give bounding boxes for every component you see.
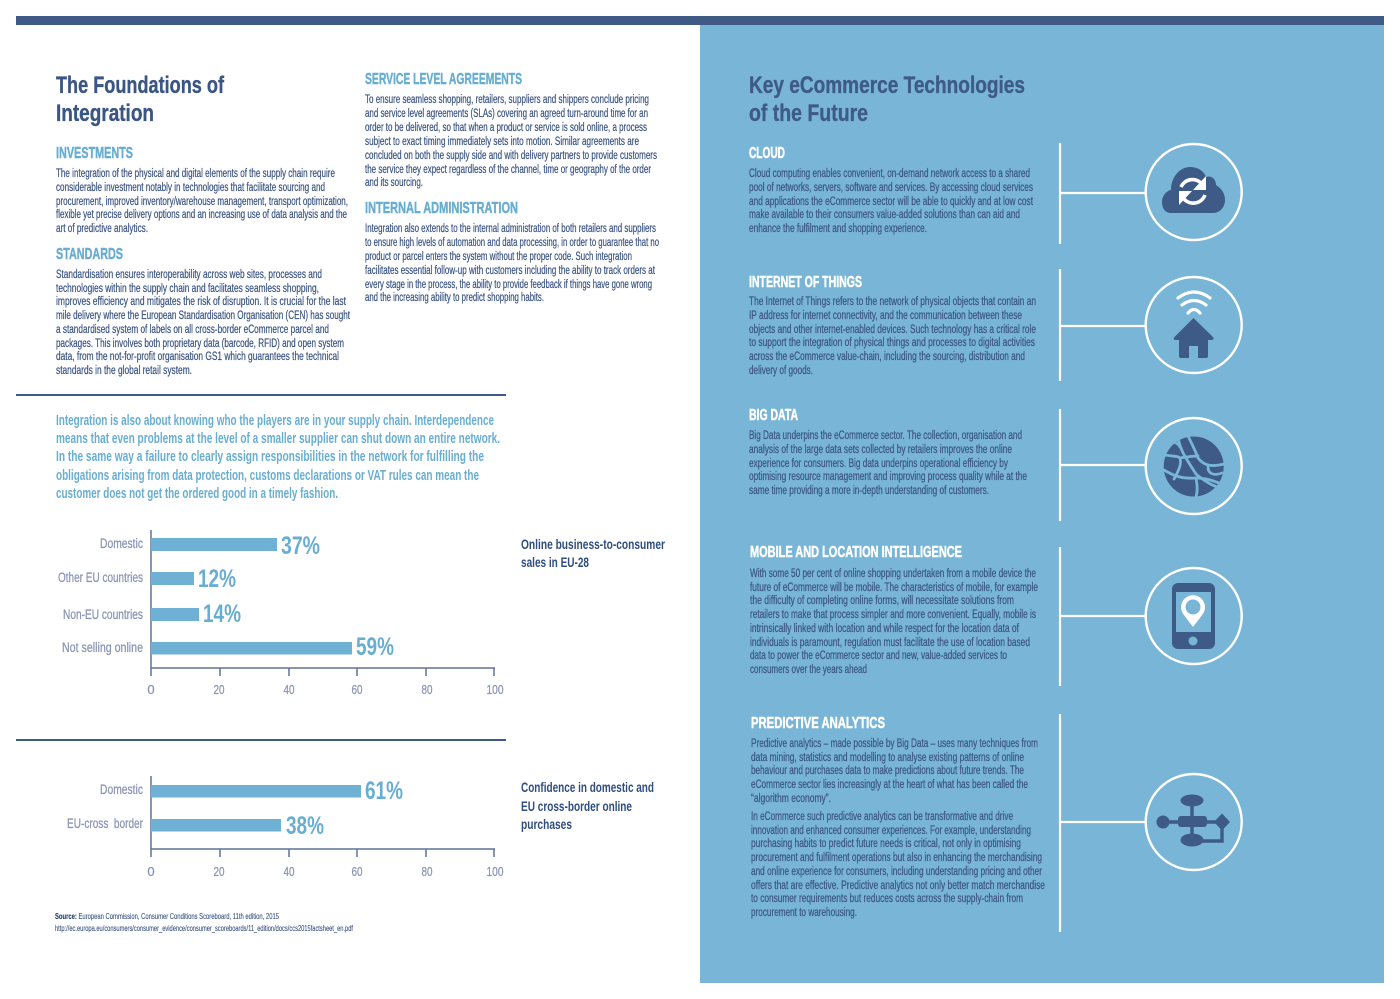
source note: http://ec.europa.eu/consumers/consumer_evidence/consumer_scoreboards/11_edition/docs/ccs2015factsheet_en.pdf [55, 923, 353, 933]
panel: key technologies background [700, 25, 1384, 983]
callout: supply chain players: In the same way a failure to clearly assign responsibilities in the network for fulfilling the [56, 449, 484, 465]
connector: mobile [1060, 547, 1146, 686]
bar chart: online business-to-consumer sales: Domestic [100, 536, 143, 551]
section: internal administration: INTERNAL ADMINISTRATION [365, 200, 518, 217]
source note [55, 911, 353, 933]
section: big data [749, 407, 1027, 497]
chart title: confidence: EU cross-border online [521, 799, 632, 814]
bar chart: online business-to-consumer sales: 60 [352, 682, 362, 697]
section: investments: The integration of the physical and digital elements of the supply chain require [56, 168, 335, 180]
callout: supply chain players [56, 413, 500, 502]
section: mobile and location intelligence: future of eCommerce will be mobile. The characteristics of mobile, for example [750, 582, 1038, 594]
section: internet of things [749, 274, 1036, 377]
section: standards: packages. This involves both proprietary data (barcode, RFID) and open system [56, 338, 344, 350]
bar chart: online business-to-consumer sales: 12% [198, 565, 236, 593]
section: internet of things: INTERNET OF THINGS [749, 274, 862, 291]
section: big data: experience for consumers. Big data underpins operational efficiency by [749, 458, 1008, 470]
bar chart: online business-to-consumer sales: 20 [214, 682, 224, 697]
bar chart: confidence in purchases [67, 776, 504, 879]
callout: supply chain players: Integration is also about knowing who the players are in your supply chain. Interdependence [56, 413, 494, 429]
chart title: online sales [521, 537, 666, 570]
section: predictive analytics [751, 715, 1045, 919]
section: internet of things: across the eCommerce value-chain, including the sourcing, distribution and [749, 351, 1025, 363]
section: standards: data, from the not-for-profit organisation GS1 which guarantees the technical [56, 351, 339, 363]
section: predictive analytics: purchasing habits to predict future needs is critical, not only in optimising [751, 838, 1021, 850]
bar chart: online business-to-consumer sales: 0 [147, 682, 155, 697]
section: cloud: pool of networks, servers, software and services. By accessing cloud services [749, 182, 1033, 194]
bar chart: confidence in purchases: Domestic [100, 782, 143, 797]
section: investments: flexible yet precise delivery options and an increasing use of data analysis and the [56, 209, 347, 221]
section: service level agreements [365, 71, 657, 189]
connector: big data [1060, 409, 1146, 521]
connector: cloud [1060, 143, 1146, 244]
section: internal administration: Integration also extends to the internal administration of both retailers and suppliers [365, 223, 656, 235]
section: standards: technologies within the supply chain and facilitates seamless shopping, [56, 283, 319, 295]
section: standards: standards in the global retail system. [56, 365, 192, 377]
section: big data: optimising resource management and improving process quality while at the [749, 471, 1027, 483]
section: big data: same time providing a more in-depth understanding of customers. [749, 485, 989, 497]
bar chart: confidence in purchases: 100 [486, 864, 504, 879]
section: cloud: CLOUD [749, 145, 785, 162]
bar chart: online business-to-consumer sales: Non-EU countries [63, 607, 143, 622]
bar chart: confidence in purchases: EU-cross border [67, 816, 143, 831]
section: mobile and location intelligence: retailers to make that process simpler and more convenient. Equally, mobile is [750, 609, 1036, 621]
source note: Source: European Commission, Consumer Conditions Scoreboard, 11th edition, 2015 [55, 911, 279, 921]
section: standards: STANDARDS [56, 246, 123, 263]
section: investments: art of predictive analytics. [56, 223, 148, 235]
section: predictive analytics: eCommerce sector lies increasingly at the heart of what has been called the [751, 779, 1028, 791]
chart title: online sales: sales in EU-28 [521, 555, 589, 570]
section: cloud: enhance the fulfilment and shopping experience. [749, 223, 927, 235]
section: service level agreements: To ensure seamless shopping, retailers, suppliers and shippers conclude pricing [365, 94, 649, 106]
section: mobile and location intelligence: the difficulty of completing online forms, will necessitate solutions from [750, 595, 1014, 607]
section: standards [56, 246, 351, 377]
chart title: confidence: Confidence in domestic and [521, 780, 654, 795]
section: internal administration: facilitates essential follow-up with customers including the ability to track orders at [365, 265, 656, 277]
section: service level agreements: SERVICE LEVEL AGREEMENTS [365, 71, 522, 88]
section: service level agreements: the service they expect regardless of the channel, time or geography of the order [365, 164, 651, 176]
title: The Foundations of Integration: Integration [56, 100, 154, 127]
section: investments [56, 145, 348, 235]
section: internet of things: The Internet of Things refers to the network of physical objects that contain an [749, 296, 1036, 308]
section: internal administration [365, 200, 659, 304]
section: mobile and location intelligence [750, 544, 1038, 676]
bar chart: online business-to-consumer sales [58, 530, 504, 697]
chart title: confidence [521, 780, 654, 832]
bar chart: online business-to-consumer sales: 100 [486, 682, 504, 697]
section: cloud: make available to their consumers value-added solutions than can aid and [749, 209, 1020, 221]
section: investments: procurement, improved inventory/warehouse management, transport optimization, [56, 196, 348, 208]
icon: predictive flowchart [1146, 774, 1242, 870]
section: predictive analytics: procurement and fulfilment operations but also in enhancing the merchandising [751, 852, 1042, 864]
section: internet of things: delivery of goods. [749, 365, 813, 377]
section: internal administration: every stage in the process, the ability to provide feedback if things have gone wrong [365, 279, 652, 291]
section: predictive analytics: to consumer requirements but reduces costs across the supply-chain from [751, 893, 1023, 905]
icon: wifi house [1146, 277, 1242, 373]
bar chart: online business-to-consumer sales: Other EU countries [58, 570, 143, 585]
section: predictive analytics: Predictive analytics – made possible by Big Data – uses many techniques from [751, 738, 1038, 750]
section: standards: mile delivery where the European Standardisation Organisation (CEN) has sought [56, 310, 351, 322]
section: predictive analytics: PREDICTIVE ANALYTICS [751, 715, 885, 732]
icon: big data globe [1146, 418, 1242, 514]
section: service level agreements: subject to exact timing immediately sets into motion. Similar agreements are [365, 136, 639, 148]
section: internal administration: and the increasing ability to predict shopping habits. [365, 292, 544, 304]
bar chart: confidence in purchases: 60 [352, 864, 362, 879]
callout: supply chain players: obligations arising from data protection, customs declarations or VAT rules can mean the [56, 468, 479, 484]
section: big data: Big Data underpins the eCommerce sector. The collection, organisation and [749, 430, 1022, 442]
divider: upper left [16, 394, 506, 396]
title: Key eCommerce Technologies of the Future: Key eCommerce Technologies [749, 72, 1025, 99]
section: predictive analytics: procurement to warehousing. [751, 907, 857, 919]
section: internet of things: IP address for internet connectivity, and the communication between these [749, 310, 1022, 322]
section: investments: considerable investment notably in technologies that facilitate sourcing and [56, 182, 325, 194]
bar chart: confidence in purchases: 0 [147, 864, 155, 879]
section: predictive analytics: innovation and enhanced consumer experiences. For example, understanding [751, 825, 1031, 837]
section: investments: INVESTMENTS [56, 145, 133, 162]
section: standards: a standardised system of labels on all cross-border eCommerce parcel and [56, 324, 329, 336]
callout: supply chain players: means that even problems at the level of a smaller supplier can shut down an entire network. [56, 431, 500, 447]
bar chart: confidence in purchases: 20 [214, 864, 224, 879]
title: The Foundations of Integration [56, 72, 225, 127]
icon: mobile location pin [1146, 568, 1242, 664]
icon: cloud sync [1146, 144, 1242, 240]
bar chart: online business-to-consumer sales: 80 [422, 682, 432, 697]
section: service level agreements: order to be delivered, so that when a product or service is sold online, a process [365, 122, 647, 134]
section: predictive analytics: data mining, statistics and modelling to analyse existing patterns of online [751, 752, 1024, 764]
bar chart: online business-to-consumer sales: 59% [356, 633, 394, 661]
section: cloud: Cloud computing enables convenient, on-demand network access to a shared [749, 168, 1030, 180]
bar chart: confidence in purchases: 80 [422, 864, 432, 879]
connector: predictive analytics [1060, 714, 1146, 932]
bar chart: online business-to-consumer sales: 40 [284, 682, 294, 697]
connector: internet of things [1060, 269, 1146, 381]
section: internal administration: to ensure high levels of automation and data processing, in order to guarantee that no [365, 237, 659, 249]
section: service level agreements: and its sourcing. [365, 177, 423, 189]
section: standards: improves efficiency and mitigates the risk of disruption. It is crucial for the last [56, 296, 347, 308]
section: service level agreements: concluded on both the supply side and with delivery partners to provide customers [365, 150, 657, 162]
section: mobile and location intelligence: consumers over the years ahead [750, 664, 867, 676]
bar chart: online business-to-consumer sales: Not selling online [62, 640, 143, 655]
section: cloud: and applications the eCommerce sector will be able to quickly and at low cost [749, 196, 1034, 208]
section: mobile and location intelligence: data to power the eCommerce sector and new, value-added services to [750, 650, 1007, 662]
section: predictive analytics: and online experience for consumers, including understanding pricing and other [751, 866, 1042, 878]
section: internet of things: objects and other internet-enabled devices. Such technology has a critical role [749, 324, 1036, 336]
section: mobile and location intelligence: intrinsically linked with location and while respect for the location data of [750, 623, 1020, 635]
bar chart: online business-to-consumer sales: 14% [203, 600, 241, 628]
section: mobile and location intelligence: individuals is paramount, regulation must facilitate the use of location based [750, 637, 1030, 649]
section: standards: Standardisation ensures interoperability across web sites, processes and [56, 269, 322, 281]
section: big data: analysis of the large data sets collected by retailers improves the online [749, 444, 1012, 456]
bar chart: confidence in purchases: 40 [284, 864, 294, 879]
section: mobile and location intelligence: MOBILE AND LOCATION INTELLIGENCE [750, 544, 962, 561]
title: The Foundations of Integration: The Foundations of [56, 72, 225, 99]
bar chart: confidence in purchases: 38% [286, 812, 324, 840]
bar chart: online business-to-consumer sales: 37% [281, 532, 320, 560]
section: predictive analytics: behaviour and purchases data to make predictions about future trends. The [751, 765, 1024, 777]
section: service level agreements: and service level agreements (SLAs) covering an agreed turn-around time for an [365, 108, 648, 120]
section: cloud [749, 145, 1034, 235]
section: big data: BIG DATA [749, 407, 798, 424]
section: predictive analytics: “algorithm economy”. [751, 793, 831, 805]
top bar [16, 16, 1384, 25]
title: Key eCommerce Technologies of the Future: of the Future [749, 100, 868, 127]
divider: lower left [16, 739, 506, 741]
section: internet of things: to support the integration of physical things and processes to digital activities [749, 337, 1035, 349]
section: mobile and location intelligence: With some 50 per cent of online shopping undertaken from a mobile device the [750, 568, 1036, 580]
chart title: confidence: purchases [521, 817, 572, 832]
title: Key eCommerce Technologies of the Future [749, 72, 1025, 127]
section: predictive analytics: offers that are effective. Predictive analytics not only better match merchandise [751, 880, 1045, 892]
callout: supply chain players: customer does not get the ordered good in a timely fashion. [56, 486, 338, 502]
chart title: online sales: Online business-to-consumer [521, 537, 666, 552]
section: internal administration: product or parcel enters the system without the proper code. Such integration [365, 251, 632, 263]
section: predictive analytics: In eCommerce such predictive analytics can be transformative and drive [751, 811, 1013, 823]
bar chart: confidence in purchases: 61% [365, 777, 403, 805]
